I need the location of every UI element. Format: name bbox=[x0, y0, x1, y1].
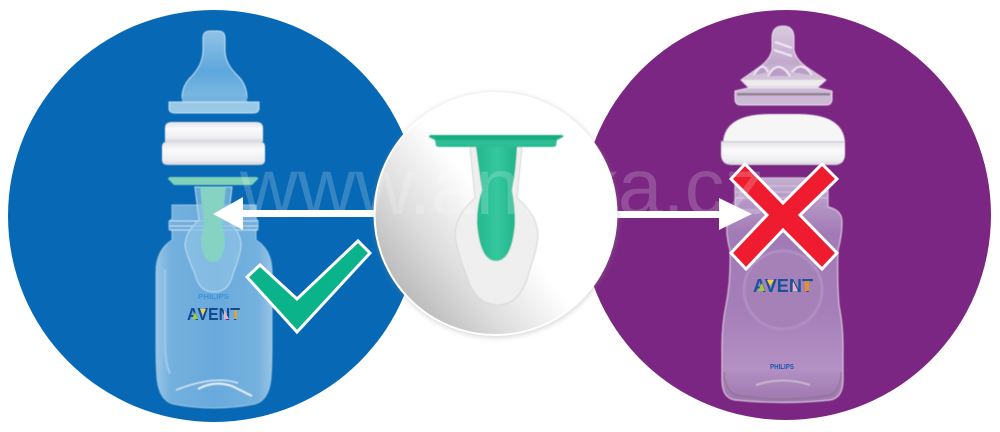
bottle centre dent bbox=[744, 251, 822, 329]
brand: Philips: PHILIPS bbox=[770, 362, 794, 371]
icon: red cross bbox=[731, 164, 837, 269]
brand: Philips: PHILIPS bbox=[198, 292, 229, 301]
panel: blue circle, correct bottle bbox=[8, 10, 420, 422]
panel: central valve disc bbox=[374, 93, 618, 337]
teat bbox=[169, 31, 259, 113]
valve close-up bbox=[429, 135, 563, 305]
icon: green check mark bbox=[247, 241, 370, 332]
anti-colic valve in bottle bbox=[168, 177, 258, 292]
teat bbox=[735, 26, 832, 105]
bottle body bbox=[156, 205, 272, 408]
bottle body bbox=[722, 178, 843, 402]
blue bottle exploded view bbox=[156, 31, 272, 408]
brand: Avent logo: AVENT bbox=[753, 275, 814, 296]
arrow: to incorrect bottle bbox=[615, 198, 752, 230]
arrow: to correct bottle bbox=[213, 197, 376, 230]
watermark: www.anicka.cz bbox=[239, 142, 765, 231]
panel: purple circle, incorrect bottle bbox=[581, 10, 991, 420]
purple bottle exploded view bbox=[721, 26, 845, 402]
brand: Avent logo: AVENT bbox=[187, 304, 240, 324]
screw collar bbox=[721, 114, 845, 165]
screw collar bbox=[162, 122, 265, 165]
